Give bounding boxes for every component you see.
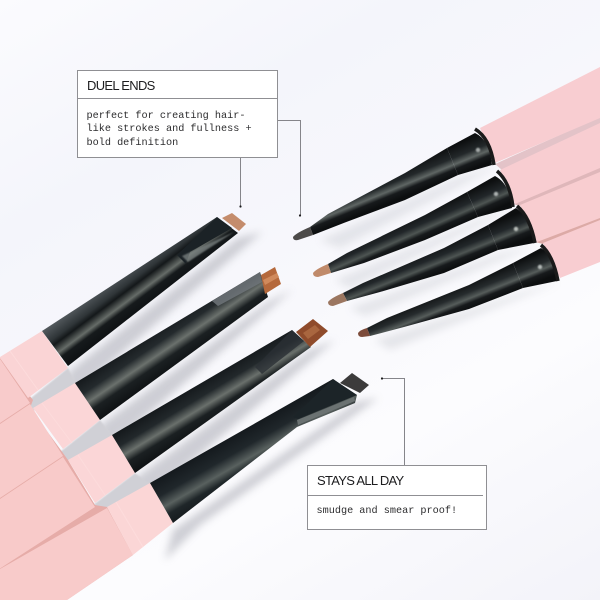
heading: stays all day: STAYS ALL DAY bbox=[317, 473, 404, 488]
body text: duel ends: like strokes and fullness + bbox=[86, 124, 252, 135]
pink body seam base bbox=[0, 358, 133, 600]
body text: stays all day: smudge and smear proof! bbox=[316, 506, 457, 517]
body text: duel ends: perfect for creating hair- bbox=[86, 110, 245, 122]
leader lines bbox=[240, 120, 404, 466]
callout: stays all day bbox=[307, 465, 487, 530]
body text: duel ends bbox=[86, 110, 252, 149]
shadow gaps between right pink bodies bbox=[495, 117, 600, 244]
shadow gaps between pink collars bbox=[26, 368, 153, 510]
right pencil 1 bbox=[293, 67, 600, 240]
leader dots bbox=[239, 205, 383, 380]
left pencil 2 bbox=[0, 267, 281, 498]
right pencil 2 bbox=[313, 123, 600, 277]
right pencil 3 bbox=[328, 172, 600, 306]
left pencil 3 bbox=[0, 319, 328, 568]
right pencil 4 bbox=[358, 220, 600, 337]
callout: duel ends bbox=[77, 70, 278, 158]
heading: duel ends: DUEL ENDS bbox=[87, 78, 155, 93]
soft cast shadows bbox=[68, 165, 560, 560]
left pencil 1 bbox=[0, 213, 246, 423]
body text: duel ends: bold definition bbox=[86, 138, 178, 149]
left pencil 4 bbox=[0, 373, 369, 600]
